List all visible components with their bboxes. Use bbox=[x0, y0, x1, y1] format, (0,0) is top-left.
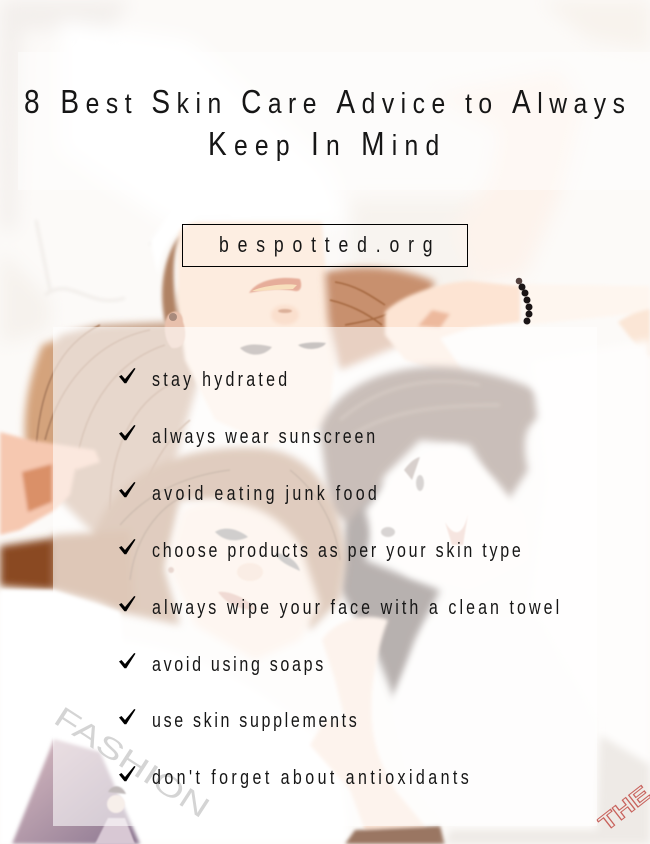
photo: left hair strands bbox=[36, 325, 190, 540]
photo: smile bbox=[249, 278, 301, 293]
photo: top face bbox=[150, 200, 335, 445]
photo: right shirt bbox=[530, 340, 650, 780]
photo: right side hair bbox=[325, 267, 435, 370]
title bbox=[24, 84, 625, 163]
item: antioxidants: don't forget about antioxidants bbox=[152, 766, 469, 788]
item: stay hydrated: stay hydrated bbox=[152, 368, 287, 390]
photo: right woman's face bbox=[365, 445, 530, 590]
photo: shirt print bbox=[12, 739, 140, 844]
list panel bbox=[53, 327, 597, 826]
item: avoid eating junk food: avoid eating junk food bbox=[152, 482, 377, 504]
photo: right woman's hair strands bbox=[340, 381, 500, 440]
item: wipe your face: always wipe your face with a clean towel bbox=[152, 596, 559, 618]
photo: left woman's hair strands bbox=[120, 470, 340, 580]
photo: central hands bbox=[310, 617, 445, 844]
photo: left woman's face bbox=[167, 501, 320, 660]
photo: red lettering on shirt: THE bbox=[594, 781, 650, 836]
photo: right woman's features bbox=[381, 457, 468, 545]
photo: upper right arm bbox=[430, 70, 582, 285]
item: always wear sunscreen: always wear sunscreen bbox=[152, 425, 375, 447]
photo: eyes bbox=[240, 344, 272, 355]
photo: left side hair bbox=[25, 290, 210, 560]
photo: left hand bbox=[0, 432, 100, 535]
item: use skin supplements: use skin supplements bbox=[152, 709, 357, 731]
photo: upper shirt folds bbox=[36, 213, 230, 301]
checklist bbox=[119, 368, 559, 788]
photo: right hair strands bbox=[330, 282, 392, 325]
website label box bbox=[182, 224, 468, 266]
photo: shirt print word: FASHION bbox=[48, 701, 215, 825]
website label box: bespotted.org bbox=[219, 233, 433, 258]
photo: top shirt and bedding bbox=[0, 0, 650, 345]
title: K eep I n M ind bbox=[208, 126, 439, 163]
photo: nose bbox=[271, 305, 299, 325]
title: 8 Best Skin Care Advice to Always bbox=[24, 84, 625, 121]
photo: right woman's dark hair bbox=[320, 367, 568, 700]
photo: hair at collar bbox=[162, 235, 180, 322]
photo: left woman's features bbox=[168, 529, 300, 610]
photo: left woman's hair bbox=[0, 448, 346, 630]
photo: neck collar bbox=[150, 200, 320, 275]
item: choose products: choose products as per your skin type bbox=[152, 539, 521, 561]
photo: right bottom shadow bbox=[445, 735, 650, 844]
photo: shirt print figure bbox=[95, 786, 135, 844]
title band bbox=[18, 52, 650, 190]
photo: lower right shirt bbox=[392, 620, 597, 826]
photo: hand and forearm upper right bbox=[385, 281, 650, 374]
photo: ear bbox=[165, 311, 185, 348]
icon: black bead bracelet bbox=[516, 278, 532, 324]
item: avoid using soaps: avoid using soaps bbox=[152, 653, 323, 675]
photo: white shirt lower left bbox=[0, 590, 175, 844]
